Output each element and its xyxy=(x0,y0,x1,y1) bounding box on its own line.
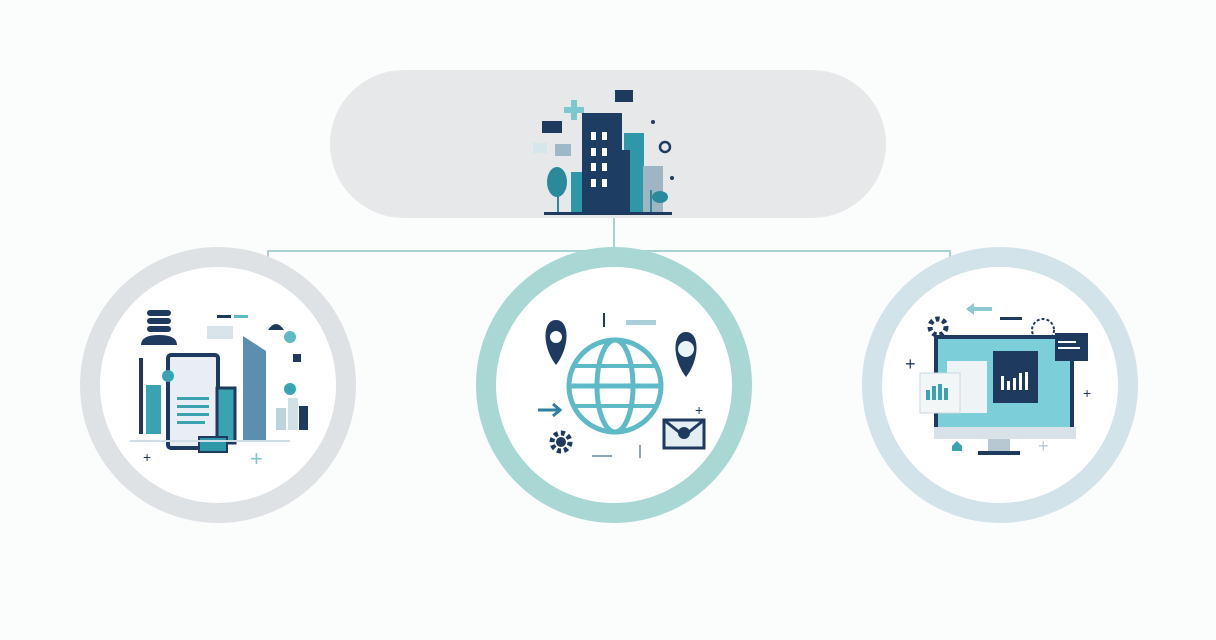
icon: reports and charts: + xyxy=(143,449,151,465)
panel: middle circle (global network) xyxy=(486,257,742,513)
icon: reports and charts: + xyxy=(250,446,263,471)
icon: reports and charts xyxy=(130,310,308,471)
panel: left circle (data / documents) xyxy=(90,257,346,513)
top panel: organization pill xyxy=(330,70,886,218)
icon: monitor dashboard: + xyxy=(905,354,916,374)
icon: monitor dashboard: + xyxy=(1038,436,1049,456)
icon: monitor dashboard: + xyxy=(1083,385,1091,401)
icon: monitor dashboard xyxy=(905,303,1091,456)
panel: right circle (analytics dashboard) xyxy=(872,257,1128,513)
icon: globe with pins and mail: + xyxy=(695,402,703,418)
icon: office buildings xyxy=(533,90,674,215)
icon: globe with pins and mail xyxy=(538,313,704,458)
connector lines xyxy=(268,218,950,262)
